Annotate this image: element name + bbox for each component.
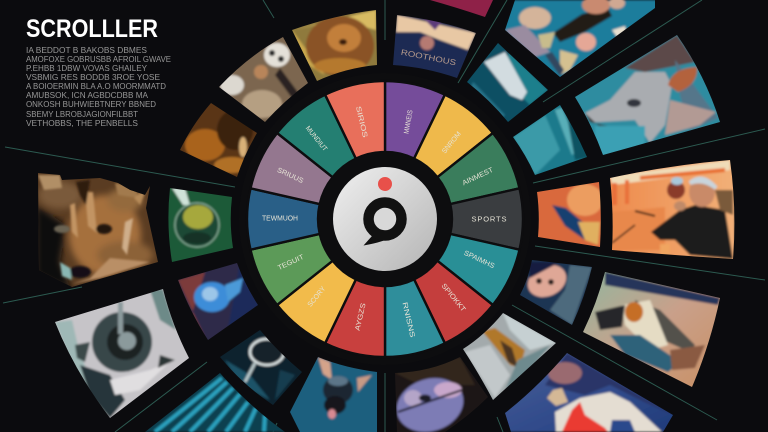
photo: teal device [513,105,587,175]
icon: speech bubble logo [364,202,402,246]
wedge: sports [450,188,523,250]
center hub [318,152,452,286]
wedge labels: SCORY [307,285,327,309]
wedge: blue [247,188,320,250]
wedge labels: RNISNS [401,302,416,339]
wedge labels: TEWMUOH [262,216,298,222]
photo: blue streaks [145,373,285,432]
photo: rock with orange [463,313,556,400]
wedge: yellow bottom [277,261,356,343]
photo: brown texture [180,103,257,177]
wedge labels: AYGZS [354,302,368,331]
wedge labels: MMNEIS [403,109,415,134]
wedge: teal green [277,95,356,177]
wedge labels [262,106,506,339]
intro text block: AMUBSOK, ICN AGBDCDBB MA [26,91,149,100]
intro text block: P.EHBB 1DBW VOVAS GHAILEY [26,64,148,73]
wedge: purple [385,81,445,159]
intro text block: IA BEDDOT B BAKOBS DBMES [26,46,147,55]
wedge: red right [414,261,493,343]
photo: goat [575,35,720,155]
wedge labels: SRIUUS [276,167,304,185]
photo: white machine [50,285,192,420]
category wheel [247,81,523,357]
intro text block [26,46,171,128]
photo: man lying [583,272,720,387]
intro text block: A BOIOERMIN BLA A.O MOORMMATD [26,82,166,91]
wedge: yellow top [414,95,493,177]
icon: red dot [378,177,392,191]
photo: computer mouse [390,355,490,432]
wedge labels: MUNDIUT [304,125,329,153]
wheel backing disc [239,73,531,365]
wedge: teal bottom [385,279,445,357]
photo: pink puppet [520,260,592,325]
photo: poster title text: ROOTHOUS [400,48,457,67]
photo: dog [290,357,377,432]
intro text block: ONKOSH BUHWIEBTNERY BBNED [26,100,156,109]
photo: person in white [505,353,673,432]
photo: lion [38,173,158,287]
photo: soldiers in orange room [610,160,734,259]
intro text block: SBEMY LBROBJAGIONFILBBT [26,110,138,119]
photo: dark blue magnifier [220,330,302,405]
wedge: green left [250,234,333,305]
photo: blue bulb [178,263,258,340]
intro text block: VSBMIG RES BODDB 3ROE YOSE [26,73,160,82]
wedge: coral [325,81,385,159]
wedge: teal right [437,234,520,305]
intro text block: AMOFOXE GOBRUSBB AFROIL GWAVE [26,55,171,64]
photo: robot poster [393,15,476,78]
intro text block: VETHOBBS, THE PENBELLS [26,119,138,128]
wedge labels: AINMEST [462,167,495,187]
photo: teal machine [467,43,548,122]
wedge labels: SNROM [441,131,463,155]
photo: green petri dish [168,188,233,262]
wedge: mauve [250,133,333,204]
wedge labels: SIRIOS [354,106,368,139]
wedge labels: TEGUIT [277,254,306,272]
photo: dalmatian [219,37,308,122]
title: SCROLLLER [26,15,158,43]
photo: plush lion [292,10,377,81]
photo: pink fragment [430,0,493,17]
wedge labels: SPORTS [472,214,506,224]
wedge labels: SPIOKKT [440,283,467,314]
photo: family on blue [500,0,660,80]
wedge labels: SPAIMHS [463,250,496,270]
photo: orange tool [537,182,601,247]
wedge: green right [437,133,520,204]
wedge: red bottom [325,279,385,357]
